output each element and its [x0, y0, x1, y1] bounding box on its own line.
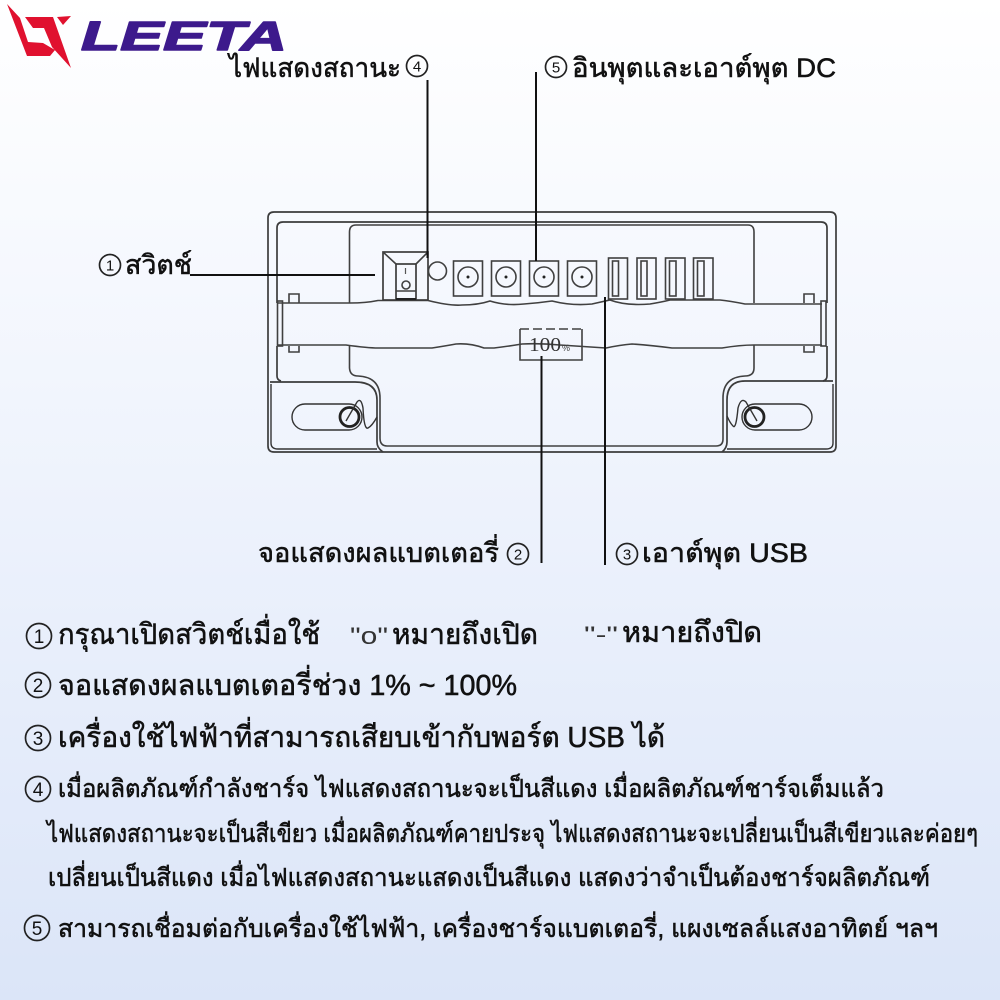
- note 4: status light behaviour: 4: [33, 780, 44, 801]
- label: USB output: 3: [623, 546, 631, 564]
- note 4: status light behaviour: เมื่อผลิตภัณฑ์กำลังชาร์จ ไฟแสดงสถานะจะเป็นสีแดง เมื่อผลิตภัณฑ์ชาร์จเต็มแล้ว: [58, 771, 884, 803]
- label: switch: สวิตช์: [125, 249, 192, 280]
- note 5: DC connections: 5: [32, 919, 42, 940]
- note 1: switch: 1: [34, 627, 44, 648]
- DC ports: [454, 261, 596, 296]
- strap with wavy edges: [277, 294, 826, 352]
- note 2: battery range: จอแสดงผลแบตเตอรี่ช่วง 1% ~ 100%: [58, 665, 517, 702]
- label: USB output: เอาต์พุต USB: [642, 537, 808, 570]
- battery percentage display: 100: [529, 334, 561, 356]
- note 1: switch: "o": [350, 623, 388, 650]
- label: status light: ไฟแสดงสถานะ: [227, 53, 401, 83]
- label: DC input output: อินพุตและเอาต์พุต DC: [572, 52, 836, 85]
- logo: LEETA: LEETA: [81, 13, 287, 59]
- status indicator light: [428, 262, 446, 280]
- leader lines: [190, 72, 605, 565]
- battery diagram: [268, 212, 836, 452]
- note 4: status light behaviour: [26, 771, 978, 892]
- USB ports: [608, 258, 713, 299]
- label: status light: 4: [413, 58, 421, 76]
- label: DC input output: 5: [552, 60, 560, 76]
- left mounting slot: [292, 400, 377, 430]
- label: switch: [100, 249, 192, 280]
- note 1: switch: หมายถึงเปิด: [392, 619, 538, 651]
- logo: LEETA: [7, 4, 287, 68]
- label: battery display: จอแสดงผลแบตเตอรี่: [258, 534, 499, 568]
- note 3: USB devices: 3: [33, 729, 43, 750]
- note 1: switch: กรุณาเปิดสวิตช์เมื่อใช้: [58, 614, 320, 652]
- note 1: switch: "-": [584, 622, 618, 647]
- label: switch: 1: [106, 258, 114, 274]
- note 5: DC connections: สามารถเชื่อมต่อกับเครื่องใช้ไฟฟ้า, เครื่องชาร์จแบตเตอรี่, แผงเซลล์แสงอาทิตย์ ฯลฯ: [58, 911, 938, 943]
- note 4: status light behaviour: เปลี่ยนเป็นสีแดง เมื่อไฟแสดงสถานะแสดงเป็นสีแดง แสดงว่าจำเป็นต้องชาร์จผลิตภัณฑ์: [48, 860, 930, 892]
- battery percentage display: %: [562, 343, 570, 353]
- note 1: switch: หมายถึงปิด: [622, 617, 762, 649]
- battery percentage display: [520, 329, 582, 360]
- casing outlines: [268, 212, 836, 452]
- right mounting slot: [727, 400, 812, 430]
- rocker switch: [383, 252, 428, 300]
- note 2: battery range: 2: [33, 676, 43, 697]
- label: battery display: 2: [514, 546, 522, 564]
- note 3: USB devices: เครื่องใช้ไฟฟ้าที่สามารถเสียบเข้ากับพอร์ต USB ได้: [58, 717, 665, 754]
- note 1: switch: [26, 614, 762, 652]
